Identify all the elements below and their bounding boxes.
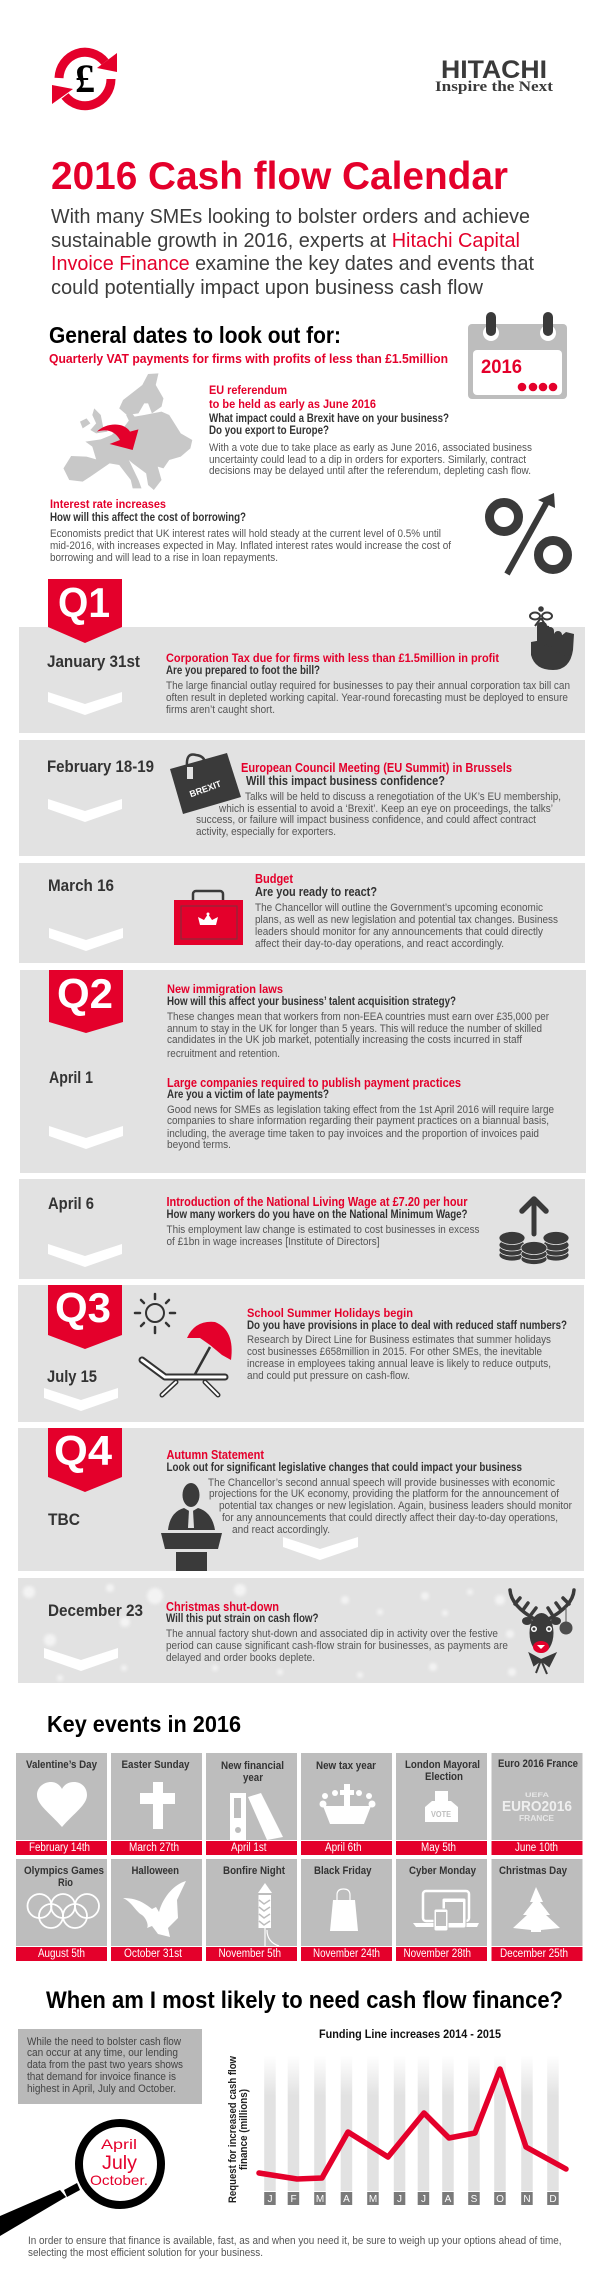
tile: Euro 2016 France: UEFA xyxy=(525,1793,550,1799)
month labels: A xyxy=(445,2194,452,2205)
text block: How many workers do you have on the National Minimum Wage? xyxy=(166,1209,468,1221)
intro text: Invoice Finance examine the key dates and events that xyxy=(51,253,534,275)
text: interest rate increases: Economists predict that UK interest rates will hold steady at the current level of 0.5% until xyxy=(50,528,441,540)
date: April 1 xyxy=(49,1068,93,1087)
tile: Bonfire Night xyxy=(218,1865,285,1960)
tile: Easter Sunday xyxy=(122,1759,190,1854)
text block: projections for the UK economy, providing the platform for the announcement of xyxy=(209,1488,560,1500)
date: February 18-19 xyxy=(47,757,154,776)
callout: lending data: that demand for invoice finance is xyxy=(27,2071,177,2083)
tile: Euro 2016 France: Euro 2016 France xyxy=(498,1758,578,1770)
axis label: Request for increased cash flow xyxy=(227,2056,239,2203)
chevron xyxy=(44,1648,118,1671)
text block: payment practices xyxy=(167,1076,554,1151)
chart title: Funding Line increases 2014 - 2015 xyxy=(319,2029,502,2041)
tile: New tax year: April 6th xyxy=(325,1842,362,1854)
tile: Olympics Games Rio xyxy=(24,1865,104,1960)
icon: magnifying glass: October. xyxy=(90,2172,148,2188)
text block: Will this impact business confidence? xyxy=(246,774,445,788)
callout: lending data: While the need to bolster cash flow xyxy=(27,2036,181,2048)
heading: general dates: General dates to look out for: xyxy=(49,322,341,348)
date: April 6 xyxy=(48,1194,94,1213)
tile: Euro 2016 France: EURO2016 xyxy=(502,1798,572,1815)
tile: Cyber Monday: November 28th xyxy=(404,1948,471,1960)
text block: plans, as well as new legislation and potential tax changes. Business xyxy=(255,914,559,926)
icon: finger with tied bow xyxy=(530,606,574,670)
text block: payment practices: Large companies required to publish payment practices xyxy=(167,1076,461,1090)
tile backgrounds: key events grid xyxy=(16,1753,582,1961)
text block: leaders should monitor for any announcements that could directly xyxy=(255,926,544,938)
month labels: J xyxy=(268,2194,272,2205)
text block xyxy=(247,1306,567,1382)
text: interest rate increases: How will this affect the cost of borrowing? xyxy=(50,512,246,524)
text block: Will this put strain on cash flow? xyxy=(166,1613,318,1625)
closing text: In order to ensure that finance is available, fast, as and when you need it, be sure to weigh up your options ahead of time, xyxy=(28,2235,562,2247)
panel: July 15 xyxy=(18,1284,584,1422)
icon: magnifying glass: April xyxy=(101,2136,137,2152)
date: March 16 xyxy=(48,876,114,895)
text: interest rate increases xyxy=(50,497,452,564)
icon: magnifying glass: July xyxy=(102,2153,138,2174)
text: EU referendum: What impact could a Brexit have on your business? xyxy=(209,413,449,425)
tile: Christmas Day: Christmas Day xyxy=(499,1865,568,1877)
text block: Budget xyxy=(255,872,294,886)
text block: Corporation Tax due for firms with less than £1.5million in profit xyxy=(166,651,499,665)
text block: immigration xyxy=(167,982,549,1060)
tile: New financial year: April 1st xyxy=(231,1842,267,1854)
month labels: J xyxy=(421,2194,426,2205)
text block: payment practices: Are you a victim of late payments? xyxy=(167,1089,329,1101)
chevron xyxy=(48,1244,122,1267)
panel: January 31st xyxy=(19,579,585,733)
text block: immigration: recruitment and retention. xyxy=(167,1048,280,1060)
month labels: A xyxy=(343,2194,350,2205)
text: EU referendum: EU referendum xyxy=(209,383,287,397)
text block: which is essential to avoid a ‘Brexit’. Keep an eye on proceedings, the talks’ xyxy=(218,803,553,815)
chevron xyxy=(49,928,123,951)
month labels: M xyxy=(369,2194,377,2205)
text block xyxy=(196,761,561,838)
tile: Valentine's Day xyxy=(26,1759,98,1854)
panel: March 16 xyxy=(19,863,585,963)
icon: speaker at podium xyxy=(161,1483,222,1571)
text block: European Council Meeting (EU Summit) in Brussels xyxy=(241,761,512,775)
text block: payment practices: companies to share information regarding their payment practices on a biannual basis, xyxy=(167,1115,549,1127)
logo: Hitachi: Inspire the Next xyxy=(435,79,553,95)
month labels: S xyxy=(471,2194,478,2205)
logo: Hitachi xyxy=(435,56,553,95)
text block: immigration: These changes mean that workers from non-EEA countries must earn over £35,000 per xyxy=(167,1011,549,1023)
date: January 31st xyxy=(47,652,140,671)
title: 2016 Cash flow Calendar xyxy=(51,155,508,198)
month labels: J xyxy=(397,2194,402,2205)
snow xyxy=(23,1584,516,1681)
text: EU referendum: to be held as early as June 2016 xyxy=(209,397,376,411)
icon: calendar 2016: 2016 xyxy=(481,357,522,378)
text block: immigration: How will this affect your business’ talent acquisition strategy? xyxy=(167,996,456,1008)
tile: Black Friday: Black Friday xyxy=(314,1865,372,1877)
tile: Halloween: October 31st xyxy=(124,1948,183,1960)
tile: London Mayoral Election xyxy=(405,1759,480,1854)
tile: Valentine's Day: Valentine’s Day xyxy=(26,1759,98,1771)
icon: magnifying glass xyxy=(0,2123,161,2236)
chevron xyxy=(44,1388,118,1411)
icon: red budget case xyxy=(174,891,243,945)
chevron xyxy=(283,1537,358,1560)
intro text: With many SMEs looking to bolster orders and achieve xyxy=(51,206,530,228)
logo: pound with circular arrows: £ xyxy=(75,56,95,101)
tile: Christmas Day: December 25th xyxy=(500,1948,568,1960)
callout: lending data: highest in April, July and October. xyxy=(27,2083,176,2095)
text block: School Summer Holidays begin xyxy=(247,1306,413,1320)
text block: The large financial outlay required for businesses to pay their annual corporation tax bill can xyxy=(166,680,570,692)
tile: Cyber Monday xyxy=(404,1865,479,1960)
text: interest rate increases: Interest rate increases xyxy=(50,497,166,511)
icon: map of Europe with red arrow xyxy=(63,373,192,490)
tile: Easter Sunday: Easter Sunday xyxy=(122,1759,190,1771)
tile: Valentine's Day: February 14th xyxy=(29,1842,90,1854)
tile: Halloween: Halloween xyxy=(132,1865,179,1877)
tile: Bonfire Night: Bonfire Night xyxy=(223,1865,285,1877)
month labels xyxy=(264,2192,559,2205)
chevron xyxy=(48,692,122,715)
text block xyxy=(166,1448,572,1536)
callout: lending data: can occur at any time, our lending xyxy=(27,2047,178,2059)
panel: February 18-19 xyxy=(19,740,585,856)
text block: Look out for significant legislative changes that could impact your business xyxy=(166,1462,522,1474)
tile: London Mayoral Election: London Mayoral xyxy=(405,1759,480,1771)
tile: New financial year: New financial xyxy=(221,1760,284,1772)
panel: April 6 xyxy=(19,1179,585,1279)
tile: Easter Sunday: March 27th xyxy=(129,1842,179,1854)
tile: London Mayoral Election: Election xyxy=(425,1771,463,1783)
tile: New financial year: year xyxy=(243,1772,264,1784)
text block: Christmas shut-down xyxy=(166,1600,279,1614)
text block xyxy=(166,1195,480,1248)
closing text xyxy=(28,2235,562,2259)
tile: Black Friday xyxy=(313,1865,380,1960)
month labels: F xyxy=(290,2194,297,2205)
text block: immigration: New immigration laws xyxy=(167,982,283,996)
text block: Research by Direct Line for Business estimates that summer holidays xyxy=(247,1334,552,1346)
text block: often result in depleted working capital. Year-round forecasting must be deployed to ensure xyxy=(166,692,568,704)
text block: The Chancellor’s second annual speech will provide businesses with economic xyxy=(208,1477,556,1489)
badge: Q1: Q1 xyxy=(58,579,110,626)
icon: reindeer with bauble xyxy=(510,1590,574,1674)
icon: parasol and sun lounger xyxy=(142,1322,232,1395)
text block: potential tax changes or new legislation. Again, business leaders should monitor xyxy=(219,1500,572,1512)
logo: pound with circular arrows xyxy=(52,52,117,106)
tile: Cyber Monday: Cyber Monday xyxy=(409,1865,477,1877)
badge: Q3: Q3 xyxy=(55,1284,111,1331)
axis label: finance (millions) xyxy=(238,2089,250,2170)
tile: Halloween xyxy=(123,1865,186,1960)
text: interest rate increases: borrowing and will lead to a rise in loan repayments. xyxy=(50,552,278,564)
panel: December 23 xyxy=(18,1578,584,1683)
badge: Q2 xyxy=(49,970,123,1033)
month labels: O xyxy=(496,2194,504,2205)
subheading: quarterly VAT: Quarterly VAT payments for firms with profits of less than £1.5million xyxy=(49,351,448,366)
tile: New tax year xyxy=(316,1760,377,1854)
date: July 15 xyxy=(47,1367,97,1386)
text block: Are you prepared to foot the bill? xyxy=(166,665,320,677)
axis label xyxy=(227,2056,250,2203)
callout: lending data: data from the past two years shows xyxy=(27,2059,184,2071)
tile: New financial year xyxy=(221,1760,284,1854)
text block xyxy=(166,651,570,716)
text block: payment practices: including, the average time taken to pay invoices and the proportion of invoices paid xyxy=(167,1128,539,1140)
intro text xyxy=(51,206,534,299)
red trend line xyxy=(259,2069,566,2179)
text block: Autumn Statement xyxy=(166,1448,265,1462)
text: EU referendum: Do you export to Europe? xyxy=(209,425,329,437)
text: interest rate increases: mid-2016, with increases expected in May. Inflated interest rates would increase the cost of xyxy=(50,540,452,552)
icon: percent with arrow xyxy=(490,493,568,574)
icon: sun xyxy=(135,1294,175,1333)
tile: Christmas Day xyxy=(499,1865,568,1960)
date: TBC xyxy=(48,1510,80,1529)
month labels: N xyxy=(523,2194,531,2205)
badge: Q4 xyxy=(48,1427,122,1492)
text block: payment practices: Good news for SMEs as legislation taking effect from the 1st April 2016 will require large xyxy=(167,1104,554,1116)
text block: period can cause significant cash-flow strain for businesses, as payments are xyxy=(166,1640,508,1652)
tile: London Mayoral Election: May 5th xyxy=(421,1842,456,1854)
heading: key events: Key events in 2016 xyxy=(47,1711,241,1737)
text block: This employment law change is estimated to cost businesses in excess xyxy=(166,1224,480,1236)
badge: Q1 xyxy=(48,579,122,643)
text block: payment practices: beyond terms. xyxy=(167,1139,231,1151)
icon: calendar 2016 xyxy=(468,312,567,399)
text block: Are you ready to react? xyxy=(255,885,377,899)
text block: success, or failure will impact business confidence, and could affect contract xyxy=(196,814,536,826)
text block: increase in employees taking annual leave is likely to reduce outputs, xyxy=(247,1358,551,1370)
tile: Olympics Games Rio: Olympics Games xyxy=(24,1865,104,1877)
chevron xyxy=(48,799,122,822)
text block: activity, especially for exporters. xyxy=(196,826,336,838)
tile: Euro 2016 France: June 10th xyxy=(515,1842,558,1854)
tile: Euro 2016 France: FRANCE xyxy=(519,1814,555,1823)
month columns xyxy=(264,2055,559,2191)
icon: Brexit briefcase: BREXIT xyxy=(188,778,223,799)
tile: New tax year: New tax year xyxy=(316,1760,377,1772)
icon: Brexit briefcase xyxy=(170,753,241,814)
intro text: could potentially impact upon business cash flow xyxy=(51,277,484,299)
tile: Olympics Games Rio: Rio xyxy=(58,1877,73,1889)
text block: The annual factory shut-down and associated dip in activity over the festive xyxy=(166,1628,498,1640)
text block: The Chancellor will outline the Government’s upcoming economic xyxy=(255,902,544,914)
month labels: D xyxy=(549,2194,557,2205)
text block: delayed and order books deplete. xyxy=(166,1652,315,1664)
text block xyxy=(166,1600,508,1664)
text block: affect their day-to-day operations, and react accordingly. xyxy=(255,938,504,950)
panel: TBC xyxy=(18,1427,584,1571)
chevron xyxy=(49,1126,123,1149)
month labels: M xyxy=(316,2194,324,2205)
text block: for any announcements that could directly affect their day-to-day operations, xyxy=(222,1512,558,1524)
tile: London Mayoral Election: VOTE xyxy=(431,1810,452,1819)
text block: immigration: candidates in the UK job market, potentially increasing the costs incurred in staff xyxy=(167,1034,523,1046)
tile: Bonfire Night: November 5th xyxy=(218,1948,281,1960)
intro text: sustainable growth in 2016, experts at Hitachi Capital xyxy=(51,230,520,252)
chart: funding line increases xyxy=(227,2029,566,2205)
panel: April 1 xyxy=(20,970,586,1173)
logo: Hitachi: HITACHI xyxy=(441,56,547,84)
text: EU referendum xyxy=(209,383,533,477)
callout: lending data xyxy=(18,2029,202,2104)
text: EU referendum: uncertainty could lead to a dip in orders for exporters. Similarly, contract xyxy=(209,454,526,466)
heading: when am I most likely: When am I most likely to need cash flow finance? xyxy=(46,1987,563,2014)
text block xyxy=(255,872,559,950)
text block: Talks will be held to discuss a renegotiation of the UK’s EU membership, xyxy=(245,791,561,803)
text block: cost businesses £658million in 2015. For other SMEs, the inevitable xyxy=(247,1346,542,1358)
text block: of £1bn in wage increases [Institute of Directors] xyxy=(166,1236,380,1248)
badge: Q4: Q4 xyxy=(54,1427,113,1474)
badge: Q2: Q2 xyxy=(57,970,113,1017)
text: EU referendum: With a vote due to take place as early as June 2016, associated business xyxy=(209,442,533,454)
tile: Black Friday: November 24th xyxy=(313,1948,380,1960)
date: December 23 xyxy=(48,1601,143,1620)
tile: Euro 2016 France xyxy=(498,1758,578,1854)
text block: firms aren’t caught short. xyxy=(166,704,275,716)
closing text: selecting the most efficient solution for your business. xyxy=(28,2247,263,2259)
badge: Q3 xyxy=(48,1284,122,1349)
icon: coins with up arrow xyxy=(499,1199,569,1264)
text block: immigration: annum to stay in the UK for longer than 5 years. This will reduce the number of skilled xyxy=(167,1023,542,1035)
tile: Olympics Games Rio: August 5th xyxy=(38,1948,85,1960)
text block: Introduction of the National Living Wage at £7.20 per hour xyxy=(166,1195,468,1209)
text block: and react accordingly. xyxy=(232,1524,330,1536)
text block: and could put pressure on cash-flow. xyxy=(247,1370,410,1382)
text: EU referendum: decisions may be delayed until after the referendum, depleting cash flow. xyxy=(209,465,531,477)
